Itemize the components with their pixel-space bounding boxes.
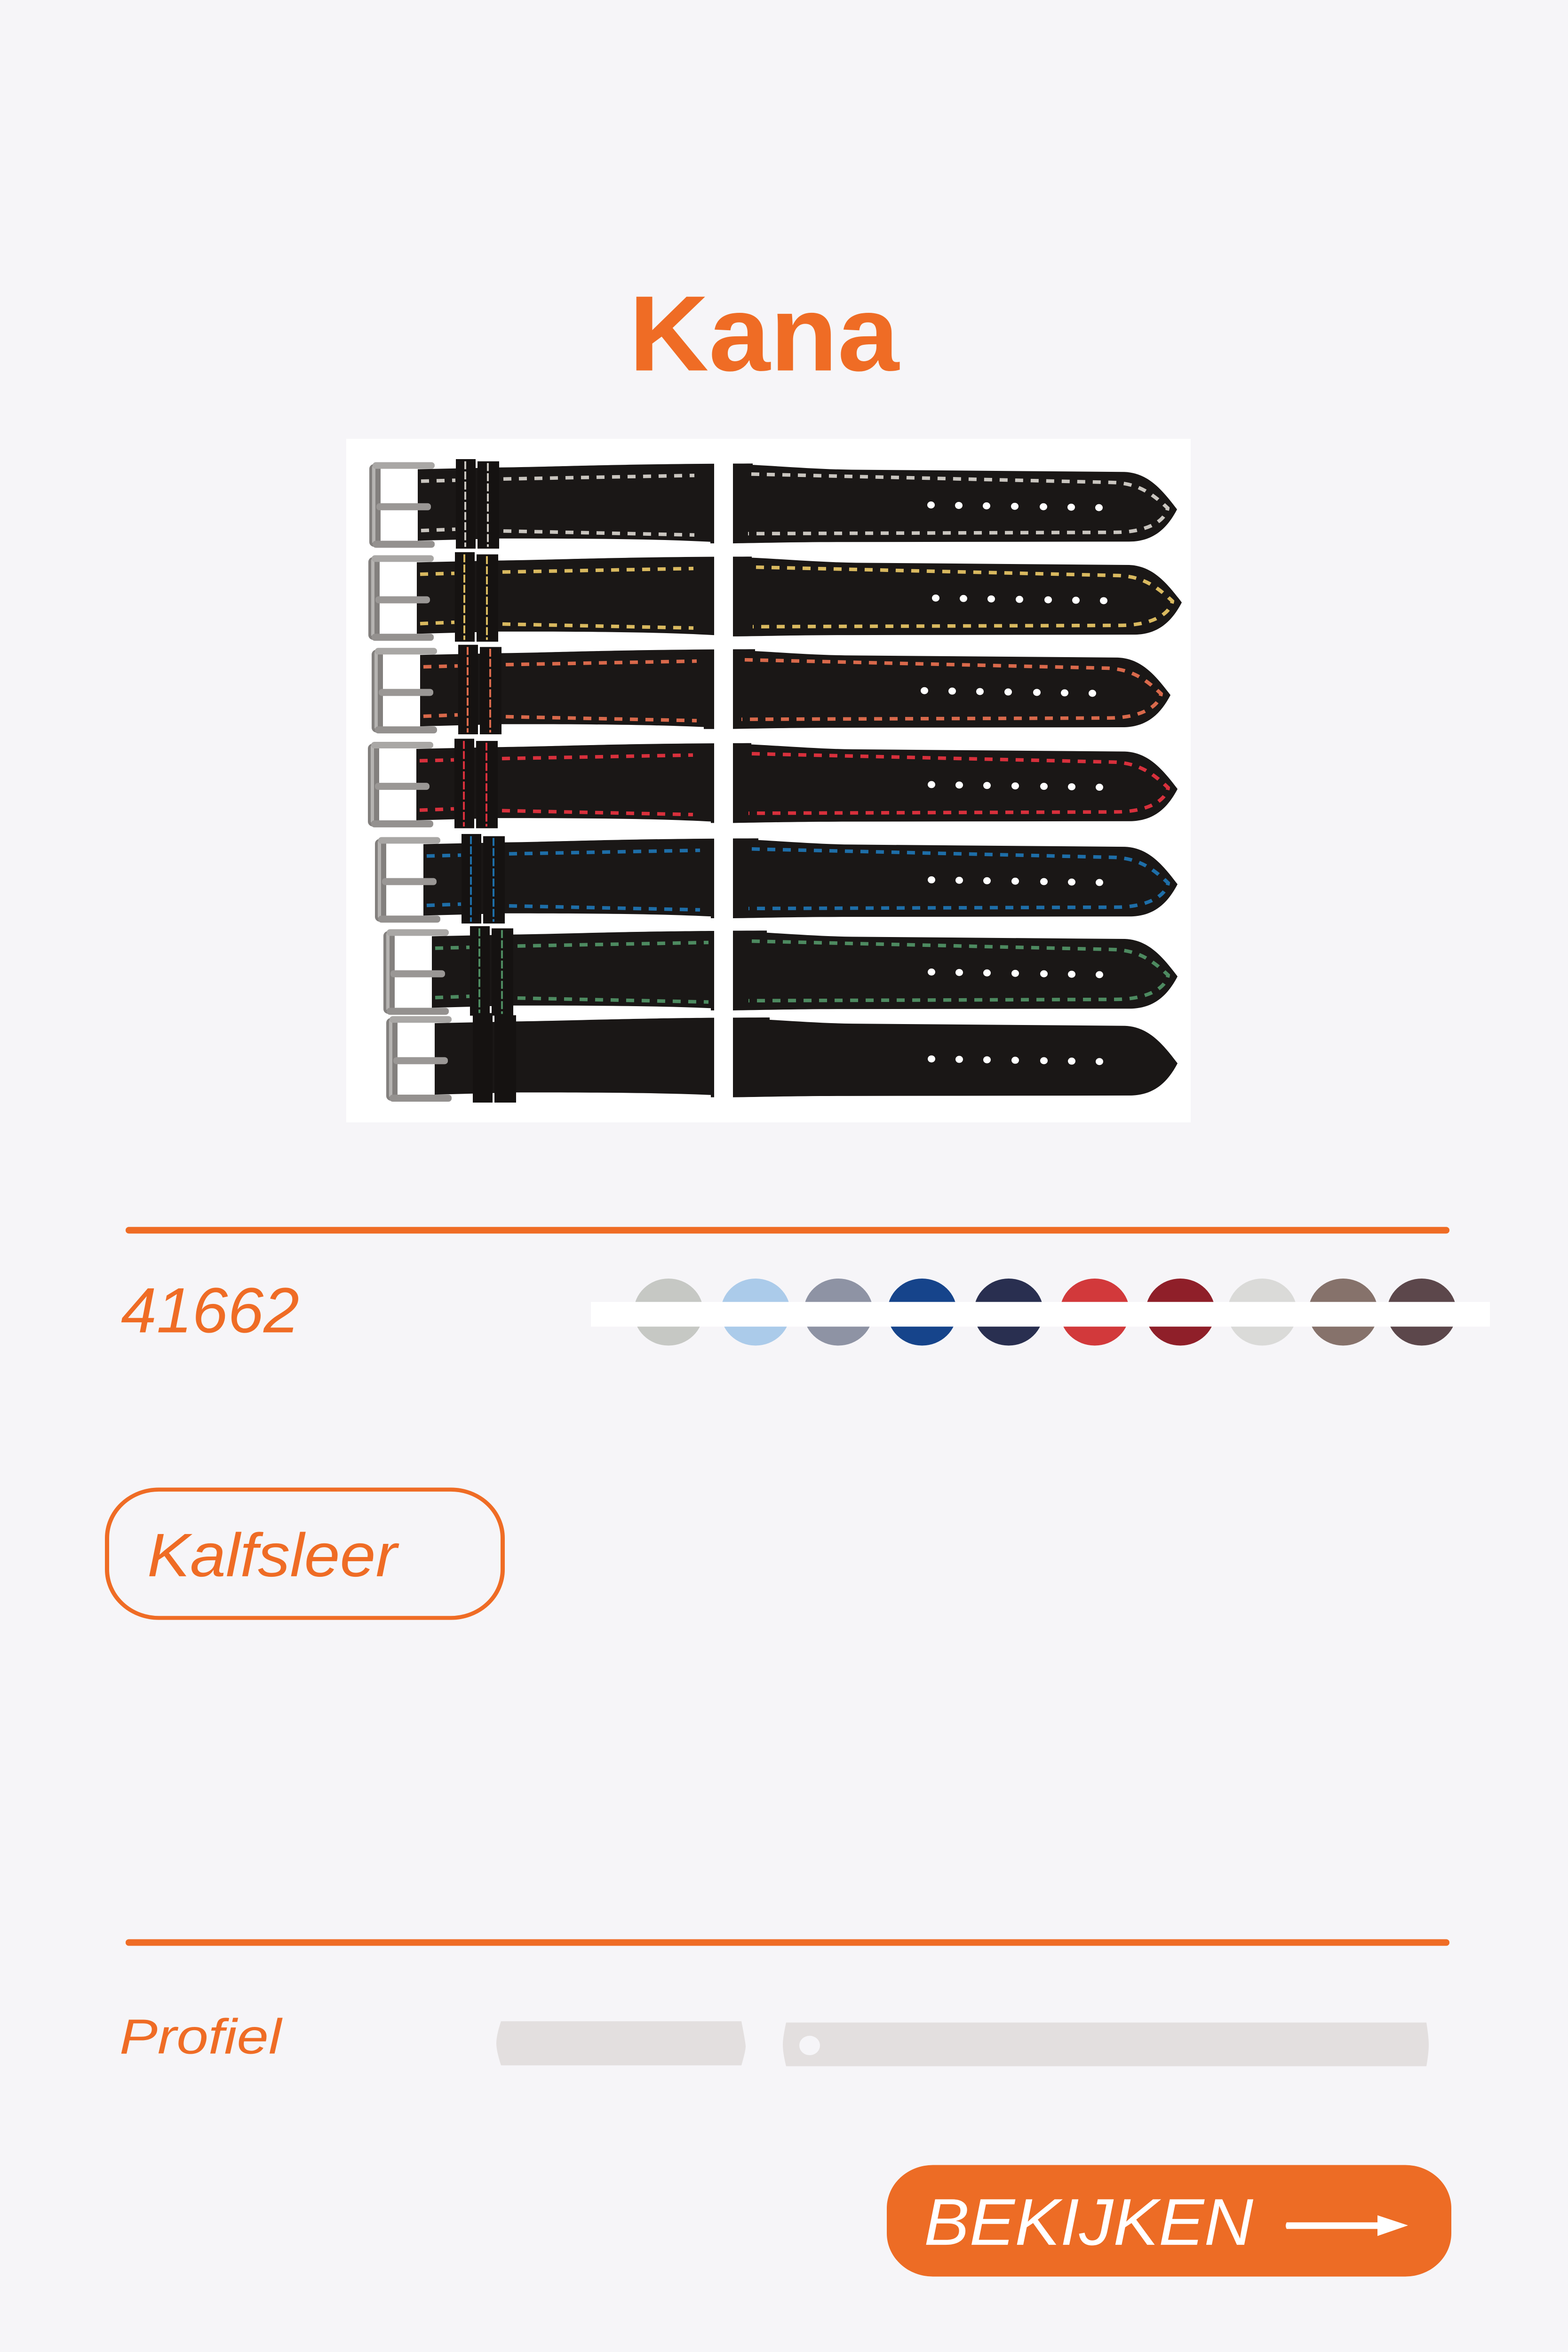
title: Kana	[629, 274, 900, 393]
article number: 41662	[121, 1275, 299, 1346]
profile shape: long piece	[783, 2023, 1429, 2066]
strap row 6: green stitching	[383, 926, 1178, 1016]
strap row 4: red stitching	[368, 739, 1178, 828]
divider line bottom	[126, 1939, 1449, 1946]
button: bekijken: BEKIJKEN	[924, 2185, 1254, 2259]
profile label: Profiel	[119, 2009, 283, 2064]
strap row 5: blue stitching	[375, 834, 1178, 923]
strap row 3: orange stitching	[372, 645, 1170, 734]
button: bekijken	[887, 2165, 1451, 2277]
strap row 1: white stitching	[369, 459, 1177, 548]
material tag	[107, 1490, 502, 1618]
strap row 2: yellow stitching	[368, 552, 1182, 642]
product photo: watch straps	[346, 439, 1191, 1122]
colour swatches	[591, 1279, 1490, 1345]
strap row 7: black stitching	[386, 1013, 1178, 1103]
material tag: Kalfsleer	[147, 1521, 399, 1589]
profile shape: short piece	[496, 2021, 746, 2066]
arrow icon	[1286, 2215, 1408, 2236]
divider line top	[126, 1227, 1449, 1233]
